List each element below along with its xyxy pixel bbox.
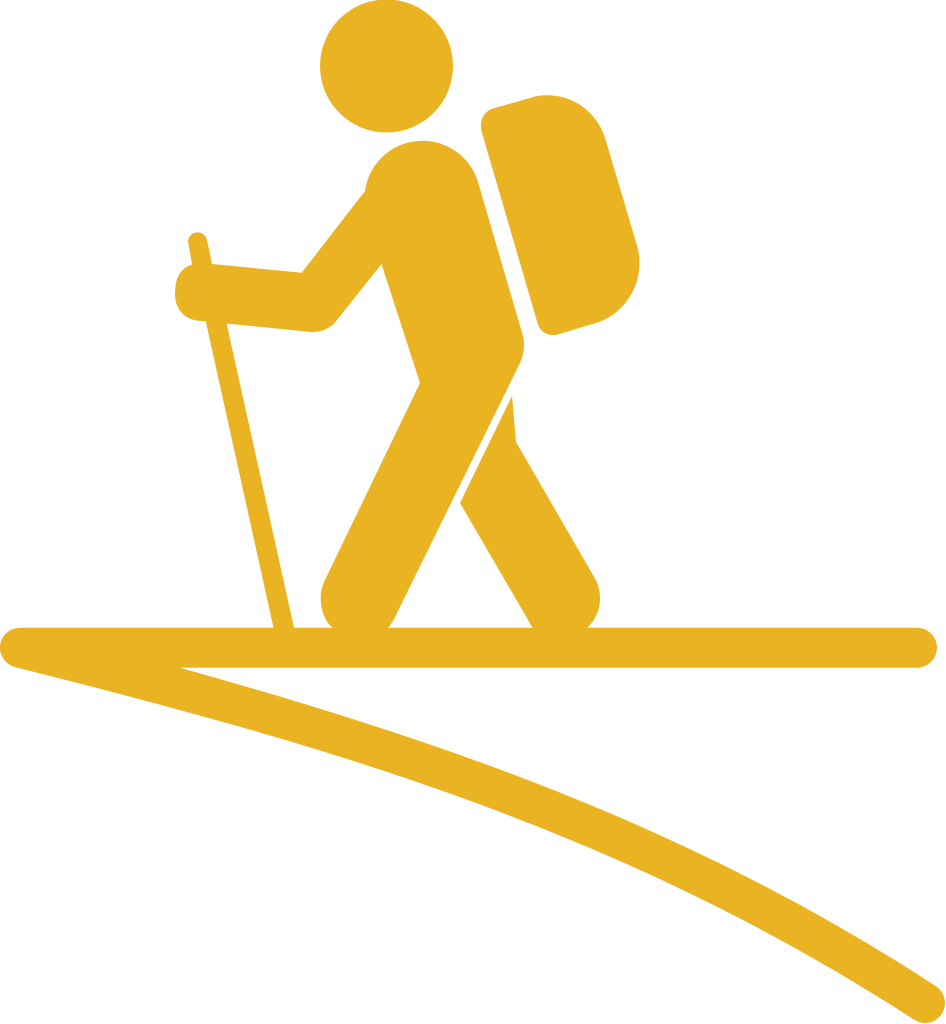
icon: trekking pole — [188, 232, 294, 630]
icon: hiker head — [320, 0, 453, 132]
icon: hiker rear leg — [460, 396, 600, 632]
icon: backpack — [481, 95, 640, 335]
icon: ground line and slope — [0, 628, 945, 1023]
icon: hiker body, arm and front leg — [175, 141, 524, 632]
